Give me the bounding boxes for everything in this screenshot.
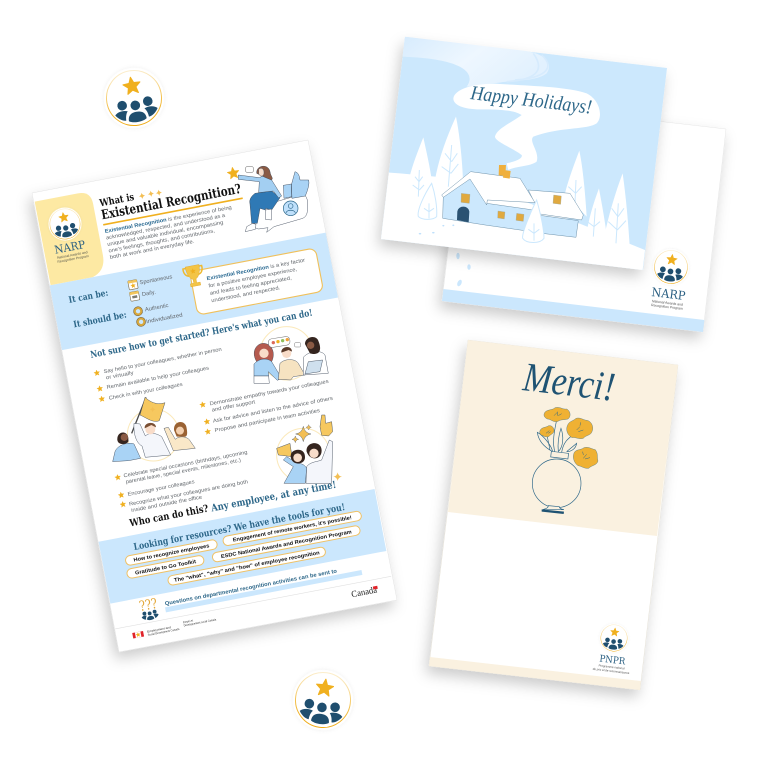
canada wordmark: Canada xyxy=(350,584,378,599)
logo: NARP on poster xyxy=(46,205,84,243)
icon: people with question marks xyxy=(138,596,160,622)
blue band: resources xyxy=(99,489,386,604)
canada wordmark flag xyxy=(373,586,378,590)
definition text: Existential Recognition is the experience of being xyxy=(104,205,232,235)
icon: avatar xyxy=(283,201,298,216)
vase xyxy=(532,451,581,510)
logo badge: top left xyxy=(99,63,169,133)
department signature xyxy=(146,614,217,637)
bullet list 1: Check in with your colleagues xyxy=(108,382,184,402)
list: it can be / should be items: Individualized xyxy=(146,313,183,325)
laptop xyxy=(305,360,323,374)
speech bubble with emoji ratings xyxy=(268,336,291,348)
face xyxy=(259,168,264,176)
logo: PNPR on merci card xyxy=(598,622,630,654)
holiday scene xyxy=(377,36,647,277)
woman with dark hair xyxy=(303,337,328,375)
blue band: it can be xyxy=(50,233,338,350)
pointing hand xyxy=(320,415,333,436)
woman in blue xyxy=(283,450,307,483)
resource pills: Gratitude to Go Toolkit xyxy=(135,559,197,577)
woman with red hair xyxy=(254,343,282,383)
bullet list 1 xyxy=(94,346,227,404)
list: it can be / should be items: Authentic xyxy=(144,303,169,313)
snow ground xyxy=(377,172,647,277)
icon: daily calendar xyxy=(129,291,140,301)
definition text: one's feelings, thoughts, and contributions, xyxy=(108,228,215,254)
icon: spontaneous calendar xyxy=(128,279,138,290)
sparkles beside title xyxy=(138,188,163,200)
footer divider xyxy=(115,576,391,629)
icon: authentic badge xyxy=(133,306,143,316)
smoke swirl top xyxy=(400,36,549,87)
sparkles xyxy=(292,425,342,481)
woman in cream xyxy=(164,422,195,451)
illustration: team with flag xyxy=(113,397,195,462)
bullet list 3: Recognize what your colleagues are doing both xyxy=(129,479,249,508)
contact text: Questions on departmental recognition activities can be sent to xyxy=(164,569,338,607)
outlined small trees xyxy=(418,183,437,219)
door xyxy=(457,207,469,222)
bullet list 3: parental leave, special events, milestones, etc.) xyxy=(125,458,242,485)
bullet list 2: Propose and participate in team activities xyxy=(214,408,321,434)
logo badge: bottom centre xyxy=(289,666,357,734)
label: it can be: It can be: xyxy=(68,289,109,306)
bullet list 3: Encourage your colleagues xyxy=(127,479,195,498)
bullet list 1: Say hello to your colleagues, whether in person xyxy=(103,347,222,375)
callout text: and leads to feeling appreciated, xyxy=(210,275,292,297)
flower details xyxy=(546,412,590,459)
list: it can be / should be items: Spontaneous xyxy=(139,274,173,286)
definition text: both at work and in everyday life. xyxy=(109,239,195,261)
callout box xyxy=(190,248,324,315)
illustration: colleagues talking with laptop xyxy=(254,327,328,383)
footprints xyxy=(419,224,454,234)
contact highlight bar xyxy=(165,570,362,612)
list: it can be / should be items xyxy=(138,274,183,325)
smoke swirl lines xyxy=(507,53,548,82)
smoke plume with text bubble xyxy=(453,84,600,170)
small chat bubble xyxy=(295,343,301,347)
flowers xyxy=(540,407,598,468)
man in cream shirt xyxy=(278,347,305,380)
yellow logo panel xyxy=(35,191,107,285)
bullet list 3: inside and outside the office xyxy=(131,495,203,514)
vase foot xyxy=(542,509,564,514)
megaphone xyxy=(277,443,292,457)
tree branches xyxy=(413,145,626,243)
postcard logo wordmark xyxy=(650,285,686,311)
shoes xyxy=(245,209,272,232)
title: what is: What is xyxy=(98,192,135,210)
thumbs up xyxy=(283,172,309,198)
woman in blue xyxy=(113,432,141,462)
merci logo wordmark: Programme national xyxy=(598,663,625,671)
bullet list 2: and offer support xyxy=(211,399,256,414)
bullet list 2: Demonstrate empathy towards your colleagues xyxy=(209,379,330,407)
logo wordmark: NARP: NARP xyxy=(53,238,87,257)
man in white shirt xyxy=(134,423,171,457)
definition text xyxy=(104,205,237,261)
callout text: Existential Recognition is a key factor xyxy=(206,258,306,282)
icon: individualized badge xyxy=(136,317,146,327)
title underline xyxy=(103,197,243,226)
department signature: Social Development Canada xyxy=(147,627,180,637)
panel: merci card xyxy=(429,340,678,690)
department signature: Développement social Canada xyxy=(183,617,217,627)
government of canada flag xyxy=(132,631,144,639)
merci logo wordmark xyxy=(592,653,632,675)
callout text: for a positive employee experience, xyxy=(208,267,298,290)
resource pills: How to recognize employees xyxy=(133,543,210,564)
logo: NARP on postcard xyxy=(651,247,691,287)
flag xyxy=(132,397,165,433)
merci logo wordmark: de prix et de reconnaissance xyxy=(592,667,630,675)
resource pills: ESDC National Awards and Recognition Program xyxy=(221,529,353,560)
blue bottom stripe xyxy=(442,289,704,332)
illustration: woman holding star on thumbs up xyxy=(227,166,309,232)
trees xyxy=(409,117,630,251)
heading: who can do this: Who can do this? xyxy=(128,504,209,530)
bullet list 2 xyxy=(199,378,336,436)
stems and leaves xyxy=(537,420,577,452)
heading: looking for resources: Looking for resources? We have the tools for you! xyxy=(133,502,346,553)
panel: poster on existential recognition xyxy=(32,140,397,652)
speech bubble with avatar xyxy=(254,195,307,232)
torso and arm xyxy=(238,175,282,198)
department signature: Employment and xyxy=(147,625,172,634)
man in white xyxy=(306,440,333,483)
title: existential recognition: Existential Recognition? xyxy=(100,182,243,223)
legs xyxy=(250,191,280,223)
postcard logo wordmark: NARP xyxy=(651,285,686,303)
house xyxy=(442,165,583,237)
postcard logo wordmark: Recognition Program xyxy=(651,303,683,311)
logo subtitle xyxy=(56,250,89,264)
hair xyxy=(257,166,272,180)
greeting: happy holidays: Happy Holidays! xyxy=(469,82,593,119)
label: it should be: It should be: xyxy=(73,311,128,330)
house windows and door xyxy=(461,193,561,221)
chat bubble xyxy=(246,167,253,172)
resource pills xyxy=(124,511,367,593)
icon: people with question marks: ??? xyxy=(138,596,159,615)
resource pills: Engagement of remote workers, it's possible! xyxy=(232,515,353,544)
heading: what you can do: Not sure how to get started? Here's what you can do! xyxy=(89,308,313,361)
logo subtitle: National Awards and xyxy=(57,250,88,260)
poster page content xyxy=(34,149,394,644)
icon: trophy xyxy=(183,264,205,288)
bullet list 1: or virtually xyxy=(105,370,135,381)
bullet list 2: Ask for advice and listen to the advice of others xyxy=(212,396,334,425)
illustration: team with megaphone xyxy=(277,415,342,483)
resource pills: The "what", "why" and "how" of employee recognition xyxy=(174,550,320,584)
logo subtitle: Recognition Program xyxy=(57,254,89,264)
list: it can be / should be items: Daily. xyxy=(142,290,157,298)
beige bottom stripe xyxy=(429,657,641,690)
postcard logo wordmark: National Awards and xyxy=(652,299,683,307)
heading: merci: Merci! xyxy=(520,353,618,410)
panel: postcard back xyxy=(442,99,726,332)
callout text xyxy=(206,258,310,304)
merci logo wordmark: PNPR xyxy=(599,654,627,668)
bullet list 1: Remain available to help your colleagues xyxy=(106,365,210,391)
callout text: understood, and respected. xyxy=(211,285,281,304)
heading: any employee: Any employee, at any time! xyxy=(210,480,337,515)
footprints in snow xyxy=(456,253,471,287)
beige top area xyxy=(448,340,678,536)
bullet list 3: Celebrate special occasions (birthdays, upcoming xyxy=(123,450,248,479)
department signature: Emploi et xyxy=(183,618,193,624)
definition text: unique and valuable individual, encompassing xyxy=(107,220,224,248)
front small tree xyxy=(523,200,544,243)
bullet list 3 xyxy=(114,450,255,516)
definition text: acknowledged, respected, and understood as a xyxy=(106,213,226,241)
star xyxy=(227,166,240,179)
panel: holiday card front xyxy=(377,36,667,277)
illustration: vase of flowers xyxy=(532,407,598,514)
